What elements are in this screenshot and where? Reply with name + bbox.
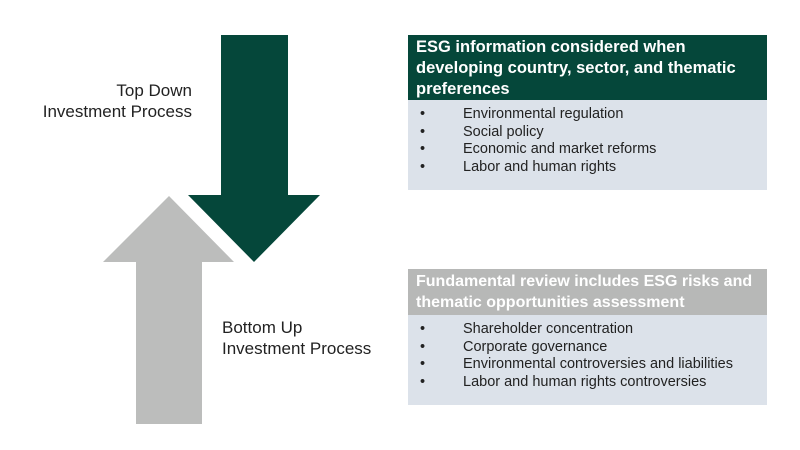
bullet list: Labor and human rights [463,158,616,174]
arrow: top down (green) [188,35,320,262]
bullet list: Corporate governance [463,338,607,354]
label: bottom up [222,318,371,358]
header: preferences [416,80,510,98]
label: top down [43,81,192,121]
label: bottom up: Bottom Up [222,318,302,337]
bullet list [420,321,733,390]
panel: top down ESG info [408,35,767,190]
bullet list: Economic and market reforms [463,141,656,157]
bullet list: Labor and human rights controversies [463,374,706,390]
header: thematic opportunities assessment [416,294,685,311]
header: ESG information considered when [416,38,686,56]
label: bottom up: Investment Process [222,339,371,358]
label: top down: Top Down [116,81,192,100]
panel: bottom up fundamental review [408,269,767,405]
header: developing country, sector, and thematic [416,59,736,77]
bullet list: Shareholder concentration [463,321,633,337]
header [408,269,767,315]
bullet list: Environmental controversies and liabilities [463,356,733,372]
header: Fundamental review includes ESG risks and [416,273,752,290]
bullet list [420,106,656,174]
arrow: bottom up (gray) [103,196,234,424]
bullet list: Social policy [463,124,544,140]
header [408,35,767,100]
bullet list: Environmental regulation [463,106,623,122]
label: top down: Investment Process [43,102,192,121]
